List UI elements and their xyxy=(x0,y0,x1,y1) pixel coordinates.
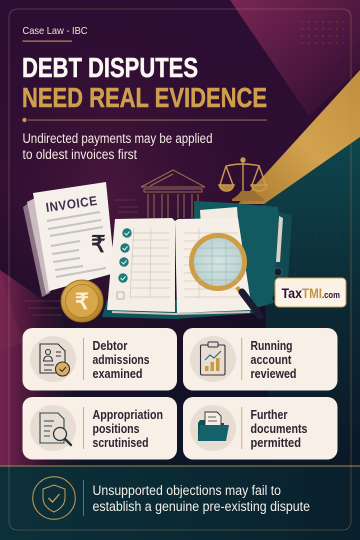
title xyxy=(22,52,267,113)
bottom takeaway text: Unsupported objections may fail to xyxy=(92,483,281,498)
card: debtor admissions: admissions xyxy=(92,352,150,367)
illustration: teal folder xyxy=(194,201,292,310)
icon: clipboard with chart xyxy=(200,342,225,375)
illustration: open ledger book xyxy=(102,218,257,319)
card: appropriation positions: Appropriation xyxy=(92,407,163,422)
eyebrow: case law label: Case Law - IBC xyxy=(22,25,88,37)
icon: courthouse xyxy=(141,170,205,218)
title divider xyxy=(22,118,267,122)
subtitle xyxy=(22,131,212,162)
card: appropriation positions xyxy=(22,397,177,460)
bottom teal band xyxy=(0,466,360,540)
logo: TaxTMI.com xyxy=(275,278,346,307)
logo: TaxTMI.com: Tax xyxy=(282,285,302,301)
icon: profile document with check xyxy=(40,344,70,376)
illustration: invoice document xyxy=(23,182,115,297)
icon: open folder xyxy=(198,412,229,441)
icon: rupee coin xyxy=(61,280,103,322)
icon: rupee coin: ₹ xyxy=(75,289,89,314)
icon: magnifying glass xyxy=(192,236,260,316)
card: appropriation positions: positions xyxy=(92,421,140,436)
subtitle: Undirected payments may be applied xyxy=(22,131,212,146)
eyebrow: case law label xyxy=(22,25,88,42)
card: debtor admissions xyxy=(22,328,177,390)
title: NEED REAL EVIDENCE xyxy=(22,82,267,113)
card: further documents xyxy=(183,397,338,460)
logo: TaxTMI.com: .com xyxy=(322,290,340,300)
logo: TaxTMI.com: TMI xyxy=(302,285,322,301)
card: running account: reviewed xyxy=(250,366,297,381)
card: debtor admissions: Debtor xyxy=(92,338,128,353)
card: further documents: permitted xyxy=(250,435,301,450)
icon: document with magnifier xyxy=(40,413,71,445)
card: running account: Running xyxy=(250,338,293,353)
icon: scales of justice xyxy=(219,158,267,201)
card: further documents: documents xyxy=(250,421,308,436)
card: further documents: Further xyxy=(250,407,288,422)
illustration: invoice document: ₹ xyxy=(91,231,106,257)
card: running account xyxy=(183,328,338,390)
bottom takeaway text xyxy=(92,483,310,514)
title: DEBT DISPUTES xyxy=(22,52,198,83)
icon: shield badge xyxy=(33,477,75,519)
card: appropriation positions: scrutinised xyxy=(92,435,149,450)
card: debtor admissions: examined xyxy=(92,366,143,381)
gold band rule xyxy=(0,466,360,467)
ledger check marks xyxy=(117,228,132,299)
gold diagonal band xyxy=(238,70,360,204)
subtitle: to oldest invoices first xyxy=(22,147,137,162)
bottom takeaway text: establish a genuine pre-existing dispute xyxy=(92,499,310,514)
illustration: invoice document: INVOICE xyxy=(45,193,98,215)
card: running account: account xyxy=(250,352,292,367)
